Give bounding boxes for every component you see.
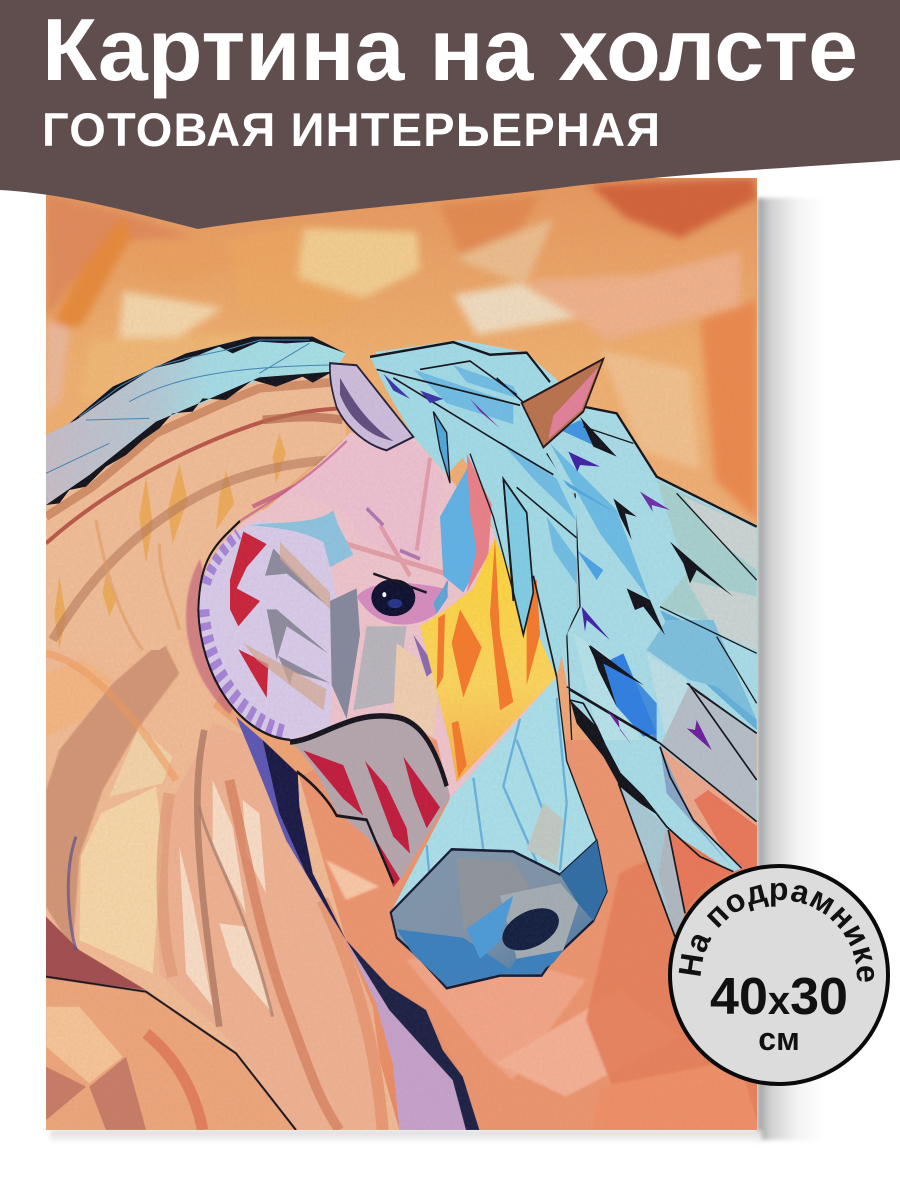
head base [198,433,557,801]
forehead shading [290,441,443,567]
mauve translucent arc [46,640,179,950]
navy throat wedge [236,717,346,940]
forelock mane edge [470,454,513,593]
cheek outline [198,521,290,740]
mane band [46,337,346,507]
paper texture [46,178,757,1130]
throat panel [290,717,450,881]
muzzle blue veins [427,698,567,883]
flame yellow panel [420,538,557,782]
pink main band [158,723,389,1130]
size badge [660,832,890,1086]
salmon background behind throat [300,740,641,1130]
horse head group [186,342,607,988]
neck base [46,510,399,1130]
right flowing mane [375,340,757,937]
brow blue mark [250,510,353,567]
lower right facets [326,860,757,1128]
cheek grey marks [265,548,330,685]
cheek disc [198,521,337,740]
pale strands [179,780,273,1013]
forelock strands [370,342,577,538]
throat red marks [303,750,440,887]
nose [391,841,607,988]
left ear [330,363,413,450]
background facets [46,178,757,520]
blue cheek feather [440,466,480,593]
below-line shoulder [46,977,296,1130]
painting: horse on canvas [46,178,759,1130]
mane lower ink [570,645,757,937]
painting background [46,178,757,1130]
top banner [0,0,900,229]
lower-right wedges between strands [662,733,757,912]
right ear [522,359,603,447]
band upper black edge [46,337,346,435]
sawtooth shadow [46,382,339,517]
cheek red shapes [230,532,267,626]
band ink lines [46,340,329,473]
cheek purple ticks [203,609,287,734]
forelock mane [370,342,577,677]
wedge under mane and shoulder [46,917,146,990]
badge unit: см [758,1021,800,1057]
mane spear over flame [503,479,533,635]
flame orange stripes [437,538,540,778]
brown strands [46,653,383,1130]
forehead facets [340,458,467,580]
band lower black teeth [46,372,333,505]
mane ink lines [546,406,757,740]
muzzle [391,677,607,988]
orange flames [54,433,286,650]
canvas shadow [50,198,823,1144]
mane dark barbs [568,417,733,707]
forelock blue streaks [413,365,577,584]
mane shaded facets, reference crop coordinates [550,420,757,740]
eye [357,574,448,625]
title: Картина на холсте [42,0,858,99]
forehead arc over cheek [240,441,347,521]
badge curved label: На подрамнике [678,882,874,982]
lower-left neck group [46,510,759,1130]
peach fill under band [46,373,346,650]
jaw ink lines [290,716,447,786]
shaded fur behind jaw [185,559,233,715]
mane lower facets [603,620,757,937]
neck arcs upper-left group [46,337,346,650]
nasal bridge [353,626,407,710]
badge size: 40x30 [710,968,848,1026]
nostril [498,900,563,958]
arcs [46,382,343,650]
subtitle: ГОТОВАЯ ИНТЕРЬЕРНАЯ [42,103,660,156]
lower neck strip [346,940,479,1130]
cream patches [79,787,163,973]
